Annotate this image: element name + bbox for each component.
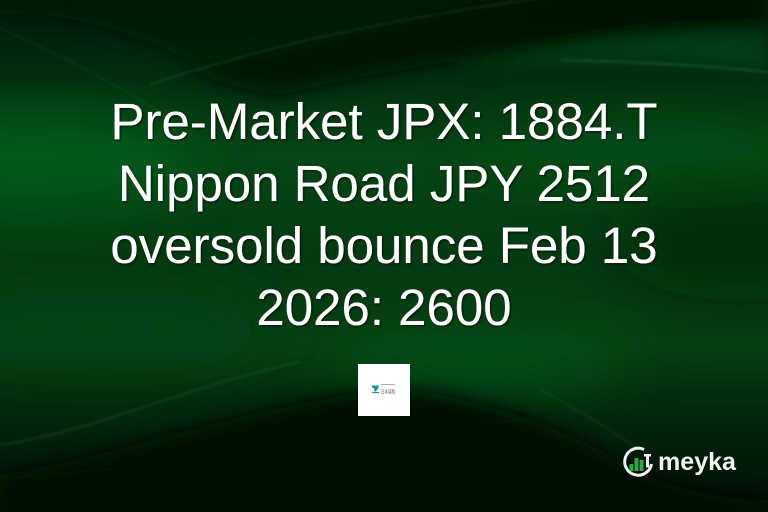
title: oversold bounce Feb 13 [110,217,658,274]
company logo: Nippon Road [358,364,410,416]
company logo: Nippon Road: 日本道路 [381,388,395,396]
icon: ring with bars [625,448,652,475]
title [110,93,658,336]
right upper band [460,33,768,72]
title: Nippon Road JPY 2512 [118,155,650,212]
bottom dark lobe [0,391,768,512]
brand logo: meyka [623,446,737,477]
title: Pre-Market JPX: 1884.T [110,93,658,150]
wordmark: meyka [658,448,737,476]
title: 2026: 2600 [256,279,512,336]
top dark wedge [180,0,768,95]
